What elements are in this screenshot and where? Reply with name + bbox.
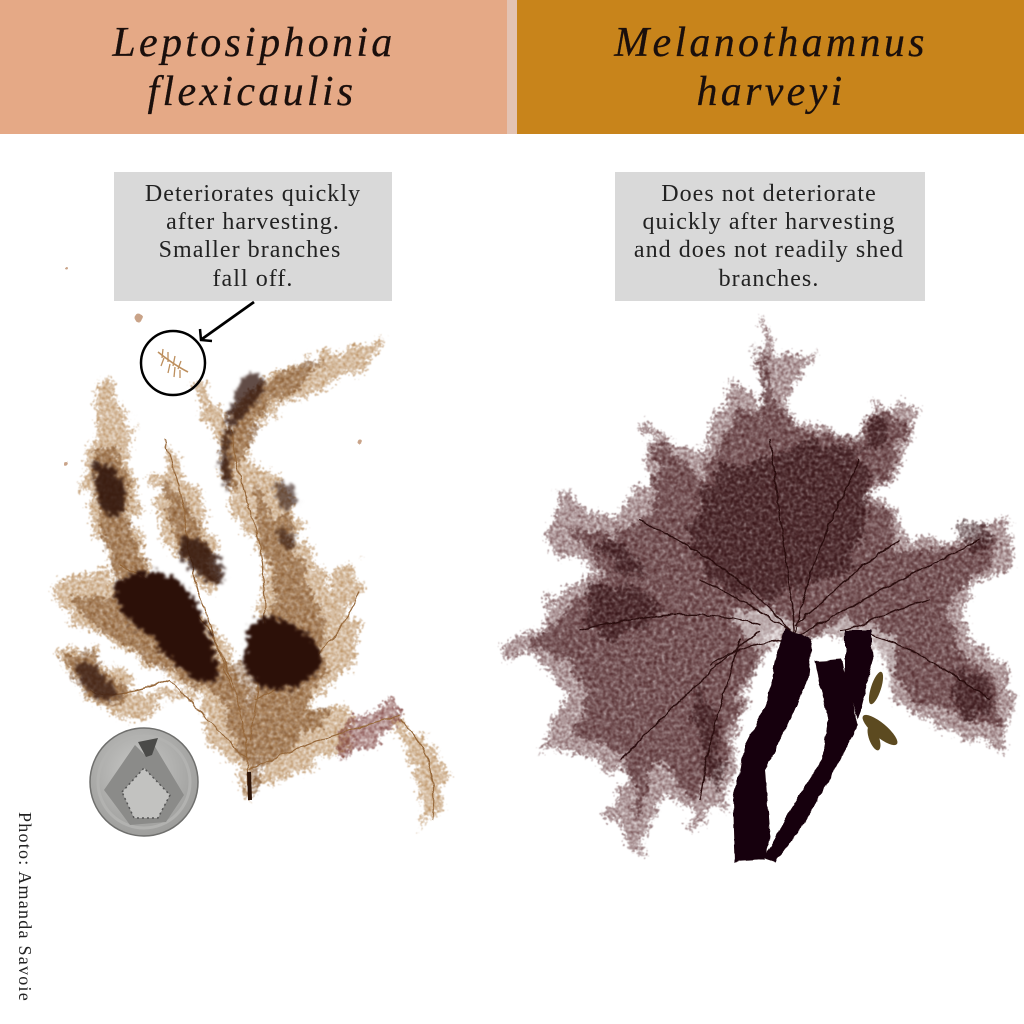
- header: Melanothamnus harveyi: harveyi: [696, 69, 846, 115]
- arrow pointing at fragment: [200, 302, 254, 341]
- fallen branch fragment in circle: [158, 349, 188, 378]
- photo credit: Photo: Amanda Savoie: [15, 812, 35, 1002]
- header: Melanothamnus harveyi: Melanothamnus: [613, 20, 928, 66]
- right seaweed specimen: [503, 315, 1015, 862]
- loose fragments: [64, 268, 362, 466]
- callout: right species note: and does not readily shed: [634, 237, 904, 263]
- right trunk: [763, 660, 858, 862]
- callout: left species note: after harvesting.: [166, 209, 340, 235]
- header: Leptosiphonia flexicaulis: [0, 0, 507, 134]
- callout: left species note: Deteriorates quickly: [145, 181, 361, 207]
- callout: right species note: quickly after harvesting: [642, 209, 896, 235]
- callout: right species note: [615, 172, 925, 301]
- callout: right species note: branches.: [719, 266, 819, 292]
- header: Leptosiphonia flexicaulis: Leptosiphonia: [111, 20, 396, 66]
- header: Melanothamnus harveyi: [517, 0, 1024, 134]
- left trunk: [733, 628, 812, 862]
- gaps under the crown: [735, 609, 896, 683]
- olive leaflets: [859, 670, 901, 752]
- header: Leptosiphonia flexicaulis: flexicaulis: [148, 69, 356, 115]
- callout: left species note: Smaller branches: [159, 237, 341, 263]
- callout: left species note: [114, 172, 392, 301]
- callout: left species note: fall off.: [213, 266, 293, 292]
- quarter coin: [90, 728, 198, 836]
- third stub: [845, 630, 873, 720]
- left seaweed specimen: [55, 333, 449, 826]
- callout: right species note: Does not deteriorate: [661, 181, 877, 207]
- circle marker: [141, 331, 205, 395]
